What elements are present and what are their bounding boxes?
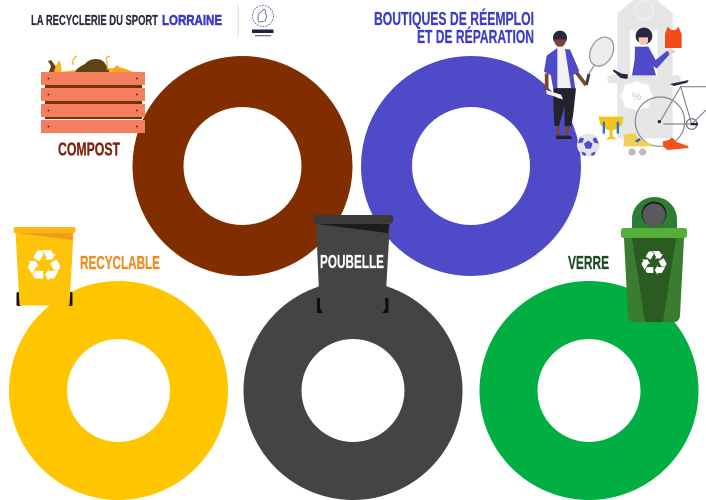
label: poubelle: POUBELLE <box>320 252 384 272</box>
donut: recyclable <box>38 310 199 471</box>
illustration: sport shop <box>544 0 706 156</box>
badge: discount: % <box>632 91 642 103</box>
label: compost: COMPOST <box>58 140 120 160</box>
shop kiosk <box>607 0 681 138</box>
icon: compost crate <box>41 56 145 133</box>
donut: boutiques <box>386 82 556 250</box>
icon: orange shoe <box>663 137 689 150</box>
header <box>31 5 274 37</box>
bicycle <box>635 80 706 146</box>
heading: boutiques: BOUTIQUES DE RÉEMPLOI <box>374 8 534 29</box>
icon: orange vest <box>665 27 682 48</box>
label: verre: VERRE <box>568 253 609 273</box>
icon: football <box>577 134 600 156</box>
woman <box>613 28 675 79</box>
donut: verre <box>508 310 670 471</box>
recycle symbol: ♻ <box>639 244 669 284</box>
recycle symbol: ♻ <box>24 241 64 292</box>
heading: boutiques: ET DE RÉPARATION <box>417 26 534 47</box>
icon: green bin <box>621 197 687 322</box>
donut: compost <box>158 82 327 250</box>
header title accent: LORRAINE <box>162 13 222 29</box>
heading: boutiques <box>374 8 534 47</box>
badge: discount <box>620 81 653 111</box>
header title: LA RECYCLERIE DU SPORT <box>31 13 158 29</box>
icon: yellow skate <box>623 133 652 156</box>
icon: black bin <box>313 215 393 314</box>
icon: yellow bin <box>14 227 76 306</box>
man with racket <box>544 31 619 139</box>
donut: poubelle <box>272 310 434 471</box>
logo: rooster crest <box>252 6 274 36</box>
label: recyclable: RECYCLABLE <box>80 253 160 273</box>
icon: trophy <box>598 117 623 139</box>
